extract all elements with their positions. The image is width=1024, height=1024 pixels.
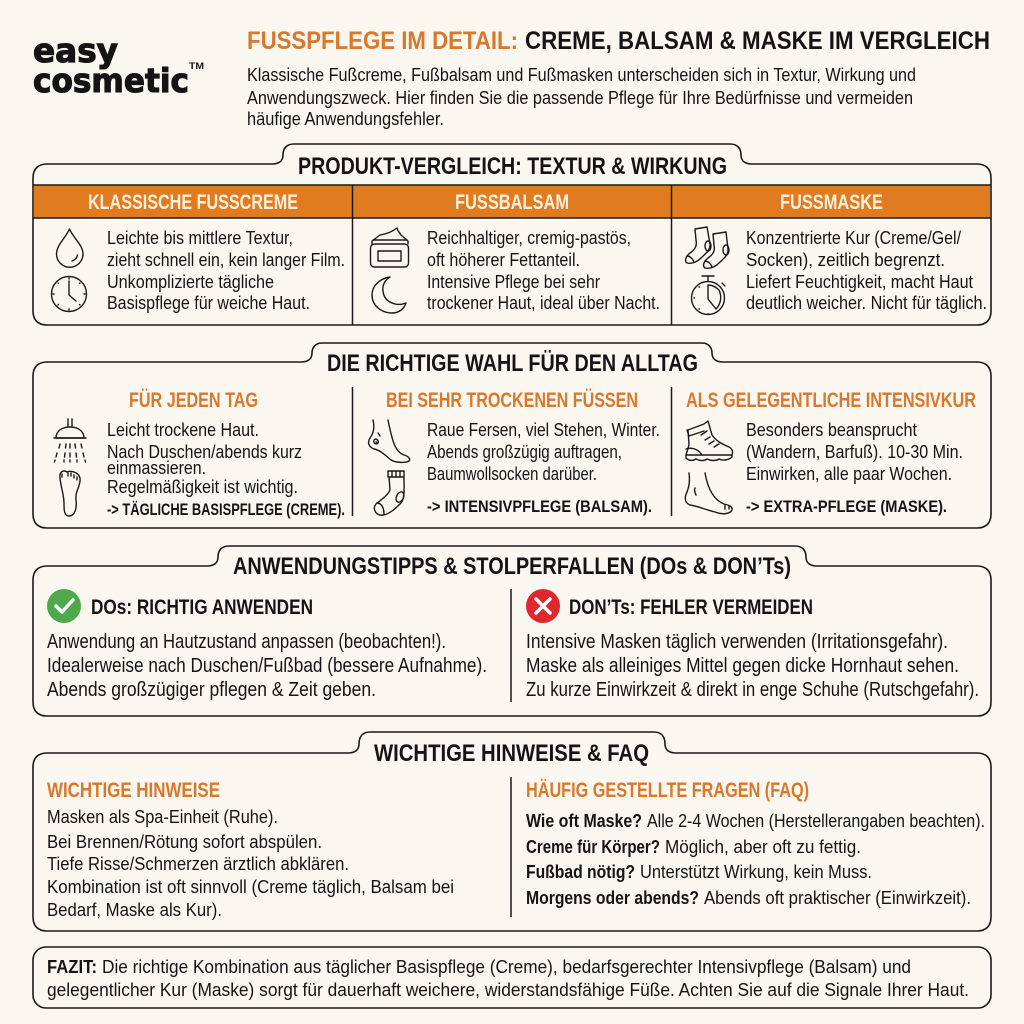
text: Fußcreme: zieht schnell ein, kein langer Film.	[107, 250, 345, 270]
icon: red cross	[526, 589, 560, 623]
list: Hinweise	[47, 807, 454, 920]
heading: Produkt-Vergleich: PRODUKT-VERGLEICH: TEXTUR & WIRKUNG	[298, 153, 727, 180]
text: Als gelegentliche Intensivkur: Besonders beansprucht	[746, 420, 917, 440]
list: FAQ: Wie oft Maske?	[526, 811, 642, 831]
text: Fußcreme: Basispflege für weiche Haut.	[107, 293, 310, 313]
subheading: Für jeden Tag: FÜR JEDEN TAG	[129, 389, 258, 412]
text: Fußmaske	[746, 228, 987, 313]
logo: easy cosmetic: cosmetic	[33, 61, 189, 100]
icon: hiking boot	[686, 421, 733, 460]
list: Hinweise: Bei Brennen/Rötung sofort abspülen.	[47, 832, 322, 852]
text: Fazit	[47, 957, 969, 1000]
list: DOs: Anwendung an Hautzustand anpassen (beobachten!).	[47, 631, 446, 653]
title	[247, 27, 990, 55]
list: DOs: Abends großzügiger pflegen & Zeit geben.	[47, 679, 376, 701]
text: Fußbalsam: Reichhaltiger, cremig-pastös,	[427, 228, 631, 248]
subheading: FAQ: HÄUFIG GESTELLTE FRAGEN (FAQ)	[526, 779, 809, 802]
text: Für jeden Tag: Leicht trockene Haut.	[107, 420, 259, 440]
text: Bei sehr trockenen Füßen: Baumwollsocken darüber.	[427, 464, 597, 484]
panel: Produkt-Vergleich	[33, 144, 991, 325]
list: FAQ: Fußbad nötig?	[526, 862, 635, 882]
intro text: Anwendungszweck. Hier finden Sie die passende Pflege für Ihre Bedürfnisse und vermeiden	[247, 88, 913, 108]
list: FAQ: Morgens oder abends?	[526, 888, 699, 908]
text: Für jeden Tag: einmassieren.	[107, 458, 206, 478]
logo: easy cosmetic: TM	[189, 61, 204, 71]
subheading: Wichtige Hinweise: WICHTIGE HINWEISE	[47, 779, 220, 802]
icon: sock	[374, 471, 405, 515]
text: Fazit: gelegentlicher Kur (Maske) sorgt für dauerhaft weichere, widerstandsfähige Füße. Achten Sie auf die Signale Ihrer Haut.	[47, 980, 969, 1000]
text: Für jeden Tag	[107, 420, 345, 519]
list: FAQ: Möglich, aber oft zu fettig.	[665, 837, 861, 857]
icon: clock	[52, 276, 86, 312]
list: Hinweise: Kombination ist oft sinnvoll (Creme täglich, Balsam bei	[47, 877, 454, 897]
logo: easy cosmetic: easy	[33, 31, 118, 70]
title: FUSSPFLEGE IM DETAIL:	[247, 27, 518, 55]
list: FAQ	[526, 811, 985, 908]
column header: Klassische Fußcreme: KLASSISCHE FUSSCREME	[88, 191, 298, 214]
panel outline with tab	[33, 144, 991, 325]
subheading: Bei sehr trockenen Füßen: BEI SEHR TROCKENEN FÜSSEN	[386, 389, 638, 412]
icon: moon	[372, 277, 406, 313]
text: Fußmaske: Konzentrierte Kur (Creme/Gel/	[746, 228, 961, 248]
text: Fußmaske: Liefert Feuchtigkeit, macht Haut	[746, 272, 973, 292]
text: Als gelegentliche Intensivkur: Einwirken, alle paar Wochen.	[746, 464, 952, 484]
list: Hinweise: Masken als Spa-Einheit (Ruhe).	[47, 807, 278, 827]
list: DOs	[47, 631, 487, 701]
text: Fußbalsam	[427, 228, 660, 313]
column header: Fußmaske: FUSSMASKE	[780, 191, 883, 214]
text: Für jeden Tag: Nach Duschen/abends kurz	[107, 442, 302, 462]
subheading: DOs: DOs: RICHTIG ANWENDEN	[91, 596, 313, 619]
text: Als gelegentliche Intensivkur: (Wandern, Barfuß). 10-30 Min.	[746, 442, 963, 462]
text: Fußmaske: deutlich weicher. Nicht für täglich.	[746, 293, 987, 313]
text: Bei sehr trockenen Füßen: -> INTENSIVPFLEGE (BALSAM).	[427, 498, 652, 516]
heading: Wichtige Hinweise und FAQ: WICHTIGE HINWEISE & FAQ	[374, 740, 649, 767]
text: Fußbalsam: trockener Haut, ideal über Nacht.	[427, 293, 660, 313]
text: Fußbalsam: Intensive Pflege bei sehr	[427, 272, 600, 292]
text: Fußmaske: Socken), zeitlich begrenzt.	[746, 250, 945, 270]
text: Als gelegentliche Intensivkur: -> EXTRA-PFLEGE (MASKE).	[746, 498, 947, 516]
icon: bare foot	[685, 473, 732, 514]
text: Als gelegentliche Intensivkur	[746, 420, 963, 516]
text: Für jeden Tag: -> TÄGLICHE BASISPFLEGE (CREME).	[107, 501, 345, 519]
subheading: DON'Ts: DON’Ts: FEHLER VERMEIDEN	[569, 596, 813, 619]
intro text: häufige Anwendungsfehler.	[247, 109, 444, 129]
list: Hinweise: Bedarf, Maske als Kur).	[47, 900, 222, 920]
panel: Fazit	[33, 947, 991, 1008]
intro text	[247, 65, 916, 129]
logo: easy cosmetic	[33, 31, 204, 100]
text: Fußcreme: Unkomplizierte tägliche	[107, 272, 274, 292]
text: Fußcreme: Leichte bis mittlere Textur,	[107, 228, 293, 248]
list: FAQ: Unterstützt Wirkung, kein Muss.	[640, 862, 872, 882]
list: FAQ: Abends oft praktischer (Einwirkzeit).	[704, 888, 971, 908]
text: Fußcreme	[107, 228, 345, 313]
panel: Wichtige Hinweise und FAQ	[33, 732, 991, 931]
panel: Anwendungstipps	[33, 546, 991, 716]
text: Bei sehr trockenen Füßen	[427, 420, 660, 516]
text: Fazit: Die richtige Kombination aus täglicher Basispflege (Creme), bedarfsgerechter Intensivpflege (Balsam) und	[102, 957, 911, 977]
icon: stopwatch	[692, 276, 725, 314]
heading: Anwendungstipps: ANWENDUNGSTIPPS & STOLPERFALLEN (DOs & DON’Ts)	[233, 553, 791, 580]
list: DOs: Idealerweise nach Duschen/Fußbad (bessere Aufnahme).	[47, 655, 487, 677]
icon: green check	[47, 589, 81, 623]
column header: Fußbalsam: FUSSBALSAM	[455, 191, 569, 214]
list: DON'Ts: Maske als alleiniges Mittel gegen dicke Hornhaut sehen.	[526, 655, 959, 677]
list: FAQ: Creme für Körper?	[526, 837, 660, 857]
icon: shower	[54, 419, 86, 462]
text: Fußbalsam: oft höherer Fettanteil.	[427, 250, 580, 270]
icon: cream jar	[370, 228, 408, 267]
text: Bei sehr trockenen Füßen: Abends großzügig auftragen,	[427, 442, 622, 462]
intro text: Klassische Fußcreme, Fußbalsam und Fußmasken unterscheiden sich in Textur, Wirkung und	[247, 65, 916, 85]
text: Fazit: FAZIT:	[47, 957, 97, 977]
list: FAQ: Alle 2-4 Wochen (Herstellerangaben beachten).	[647, 811, 985, 831]
list: DON'Ts: Intensive Masken täglich verwenden (Irritationsgefahr).	[526, 631, 948, 653]
text: Für jeden Tag: Regelmäßigkeit ist wichtig.	[107, 477, 298, 497]
heading: Die richtige Wahl: DIE RICHTIGE WAHL FÜR DEN ALLTAG	[327, 350, 698, 377]
icon: socks	[686, 227, 729, 268]
icon: foot	[60, 471, 80, 516]
orange header band	[34, 185, 990, 218]
list: DON'Ts	[526, 631, 979, 701]
panel: Die richtige Wahl	[33, 343, 991, 528]
list: Hinweise: Tiefe Risse/Schmerzen ärztlich abklären.	[47, 854, 349, 874]
text: Bei sehr trockenen Füßen: Raue Fersen, viel Stehen, Winter.	[427, 420, 660, 440]
icon: dry heel	[369, 420, 410, 462]
icon: water drop	[56, 229, 83, 267]
